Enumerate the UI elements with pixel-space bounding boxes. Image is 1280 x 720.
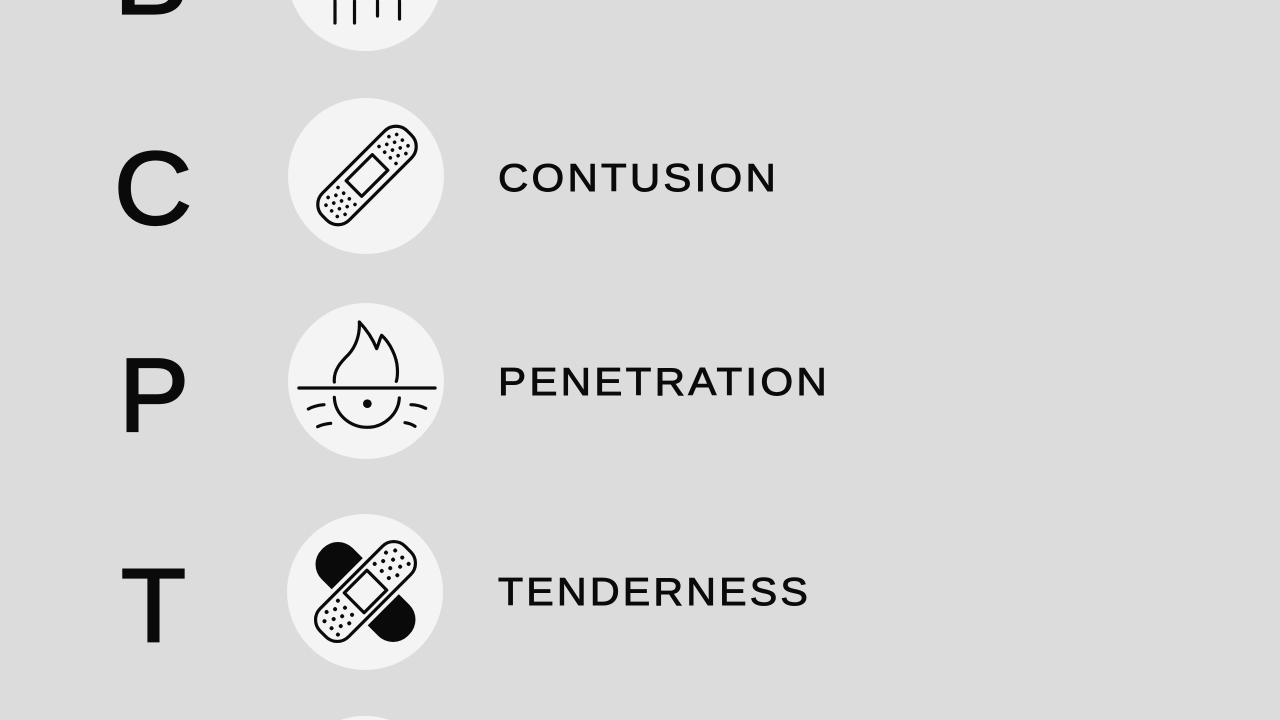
icon: cropped circle with vertical lines bbox=[292, 0, 438, 51]
label: tenderness: TENDERNESS bbox=[498, 571, 811, 614]
row: tenderness bbox=[121, 514, 811, 670]
label: contusion: CONTUSION bbox=[498, 157, 779, 200]
icon: flame over skin bbox=[288, 303, 444, 459]
letter T: T bbox=[121, 548, 186, 664]
letter C: C bbox=[114, 131, 192, 247]
icon: cropped circle at bottom bbox=[340, 716, 390, 720]
row: contusion bbox=[114, 98, 779, 254]
label: penetration: PENETRATION bbox=[498, 361, 830, 404]
row: penetration bbox=[119, 303, 830, 459]
icon: crossed bandage bbox=[287, 514, 443, 670]
letter P: P bbox=[119, 338, 189, 454]
icon: bandage bbox=[288, 98, 444, 254]
